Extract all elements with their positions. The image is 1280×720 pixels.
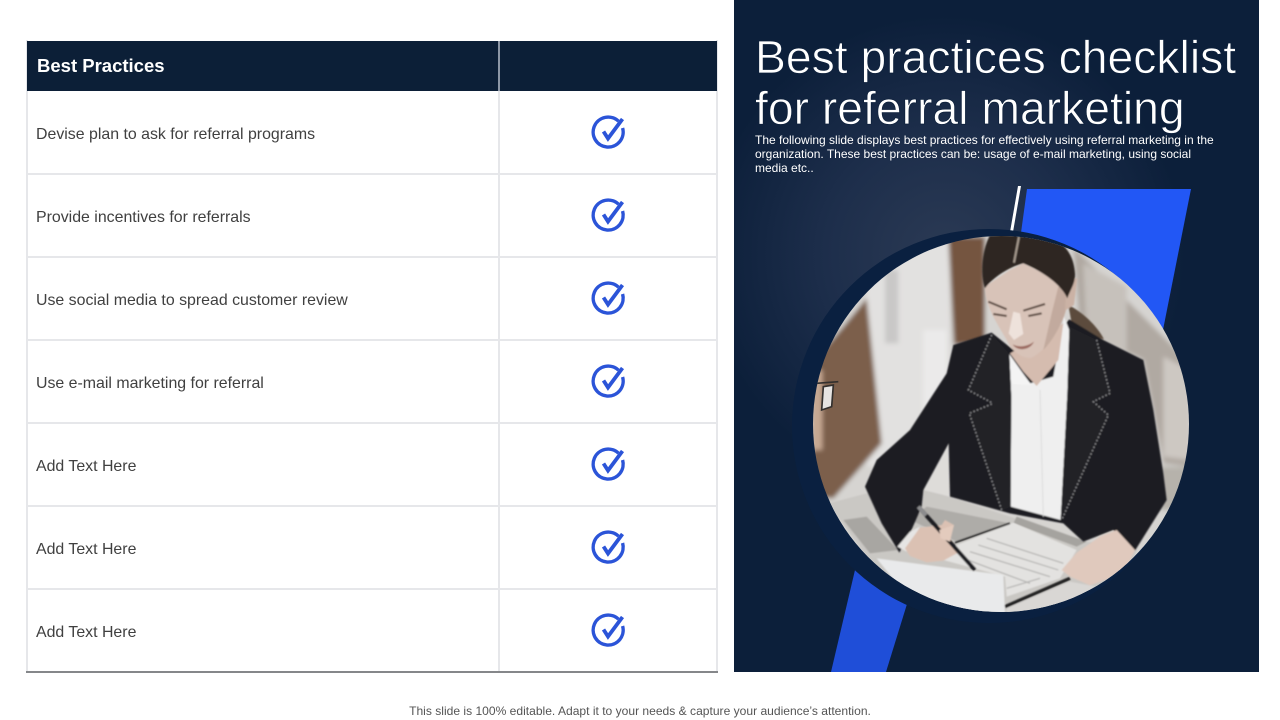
row 2	[27, 175, 717, 258]
panel glow	[734, 0, 1259, 672]
left lapel	[980, 354, 1012, 506]
footer note: This slide is 100% editable. Adapt it to your needs & capture your audience’s attention.	[409, 704, 871, 718]
photo backdrop	[813, 236, 1189, 612]
row 2: Provide incentives for referrals	[36, 209, 251, 226]
papers	[943, 523, 1077, 597]
row 3	[27, 258, 717, 341]
title: Best practices checklist	[755, 31, 1236, 83]
photo: woman signing documents	[813, 236, 1189, 612]
hair	[982, 235, 1075, 298]
accent: blue lower shape	[831, 570, 907, 672]
folder edges	[955, 523, 1010, 543]
left hand	[905, 520, 960, 562]
mouth	[1013, 342, 1034, 349]
ear	[1066, 278, 1077, 310]
paper text	[963, 538, 1063, 588]
pen clip	[918, 507, 926, 515]
description text: organization. These best practices can be: usage of e-mail marketing, using social	[755, 147, 1191, 161]
row 5	[27, 424, 717, 507]
shirt	[1009, 317, 1069, 520]
table header	[27, 41, 717, 91]
pen	[918, 507, 975, 570]
right lapel	[1060, 330, 1106, 519]
face	[985, 263, 1068, 358]
table bottom rule	[26, 671, 718, 673]
row 4	[27, 341, 717, 424]
photo window frame detail	[817, 382, 838, 410]
accent: blue upper shape	[1020, 189, 1191, 345]
collar left	[1024, 374, 1031, 384]
description text: media etc..	[755, 161, 814, 175]
right hand	[1062, 530, 1135, 585]
lapel stitching	[968, 335, 1110, 520]
row 7	[36, 613, 625, 647]
title	[755, 31, 1236, 134]
row 5: Add Text Here	[36, 458, 136, 475]
photo table	[830, 491, 1136, 612]
jacket	[865, 319, 1167, 553]
row 1: Devise plan to ask for referral programs	[36, 126, 315, 143]
nose highlight	[1009, 312, 1023, 340]
shirt cuff	[897, 527, 920, 552]
panel background	[734, 0, 1259, 672]
row 3: Use social media to spread customer review	[36, 292, 348, 309]
header divider	[498, 41, 500, 91]
header label: Best Practices	[37, 55, 165, 76]
laptop	[877, 558, 1005, 613]
neck	[1010, 323, 1063, 386]
shirt shadow	[1040, 390, 1043, 517]
lower table strip	[1007, 582, 1097, 613]
row 7: Add Text Here	[36, 624, 136, 641]
face shadow	[1043, 287, 1068, 350]
description text	[755, 133, 1214, 175]
table grid frame	[26, 40, 718, 671]
accent: white line	[1010, 186, 1021, 232]
eyebrows and eyes	[988, 302, 1045, 316]
row 4: Use e-mail marketing for referral	[36, 375, 264, 392]
row 6: Add Text Here	[36, 541, 136, 558]
ponytail	[1068, 305, 1104, 339]
description text: The following slide displays best practices for effectively using referral marketing in the	[755, 133, 1214, 147]
photo woman	[865, 235, 1167, 613]
row 6	[27, 507, 717, 590]
title: for referral marketing	[755, 82, 1185, 134]
table column divider	[498, 90, 500, 672]
dark circle behind photo	[792, 229, 1186, 623]
fingers over pen	[939, 525, 954, 542]
hair parting	[1014, 237, 1019, 263]
row 1	[27, 92, 717, 175]
panel: dark title and photo panel	[734, 0, 1259, 672]
